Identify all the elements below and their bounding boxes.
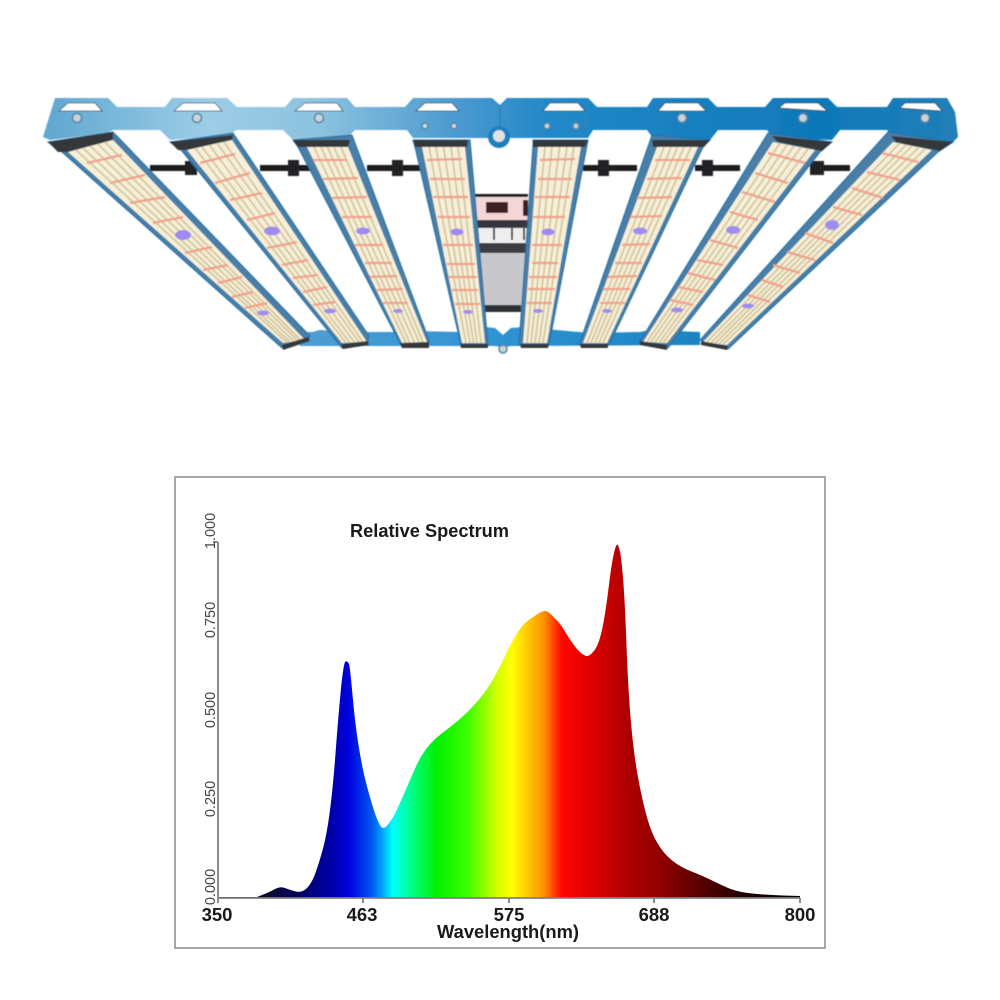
light bar 1 (48, 132, 310, 350)
chart panel: relative spectrum (175, 477, 825, 948)
x axis labels: 350 (202, 904, 232, 925)
x axis labels: 800 (785, 904, 815, 925)
x axis labels: 463 (347, 904, 377, 925)
chart title: Relative Spectrum (350, 521, 509, 541)
y axis labels: 0.750 (203, 602, 219, 638)
x axis labels: 575 (494, 904, 524, 925)
chart border (175, 477, 825, 948)
spectrum area (218, 545, 800, 898)
light bar 3 (293, 135, 429, 348)
grow light fixture (43, 98, 958, 353)
x axis title: Wavelength(nm) (437, 922, 579, 942)
light bar 8 (700, 132, 953, 350)
bottom rail (295, 327, 700, 353)
y axis labels: 1.000 (203, 513, 219, 549)
light bar 5 (519, 140, 588, 348)
connecting wires (150, 160, 850, 176)
y axis labels (203, 513, 219, 905)
power driver box (475, 194, 528, 312)
x axis labels (202, 904, 815, 925)
y axis labels: 0.250 (203, 781, 219, 817)
top frame (43, 98, 958, 148)
light bar 6 (579, 135, 710, 348)
y axis labels: 0.500 (203, 692, 219, 728)
axes and ticks (213, 542, 800, 903)
light bar 4 (413, 140, 488, 348)
light bar 2 (170, 133, 369, 349)
light bar 7 (639, 133, 832, 350)
y axis labels: 0.000 (203, 869, 219, 905)
x axis labels: 688 (639, 904, 669, 925)
